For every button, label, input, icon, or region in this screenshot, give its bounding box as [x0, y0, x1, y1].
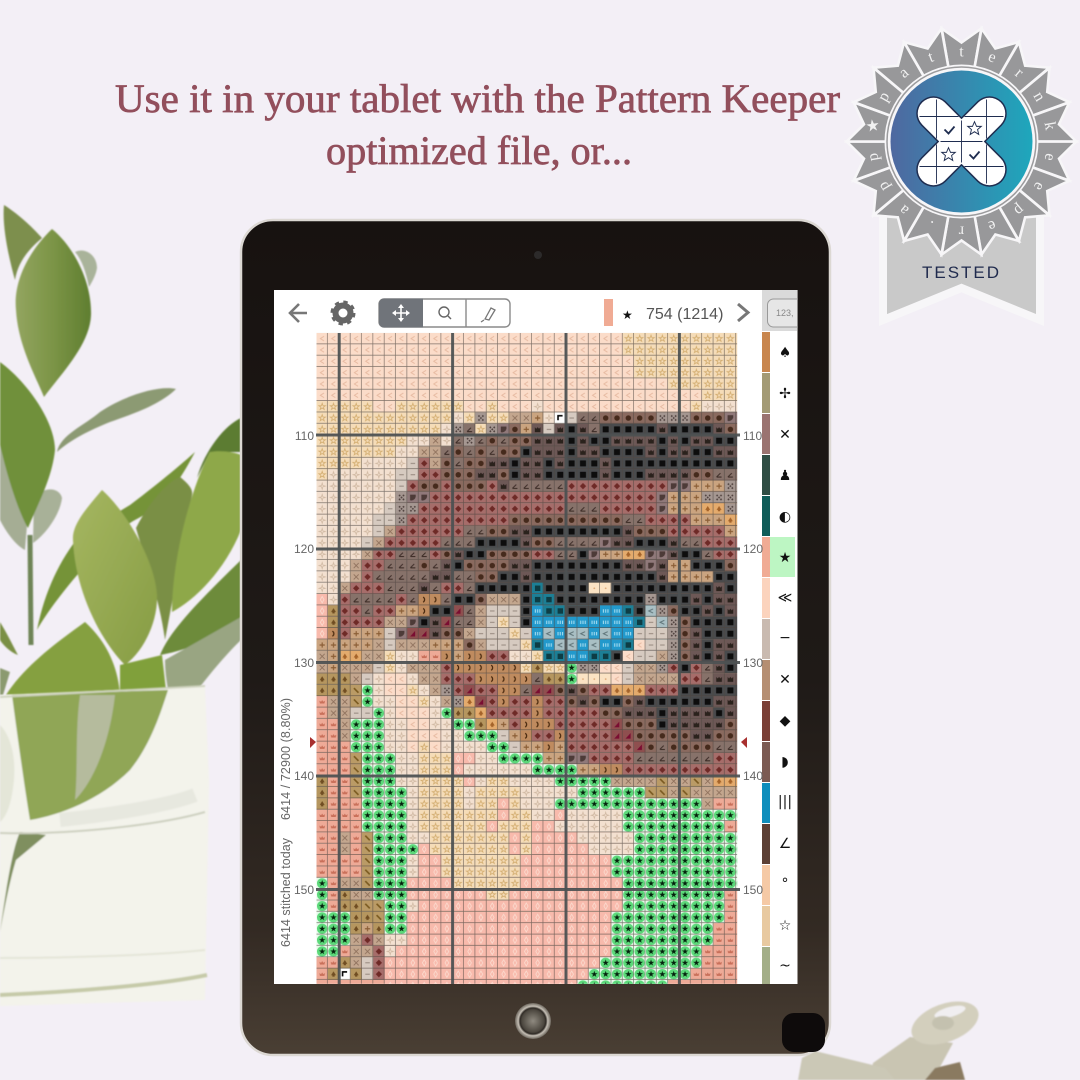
side palette: ~	[779, 958, 791, 974]
star burst with letters: e	[986, 48, 998, 67]
side palette: ≪	[778, 590, 792, 606]
star burst with letters: e	[1041, 152, 1059, 162]
row rulers: 130	[294, 656, 314, 670]
star burst with letters: r	[958, 222, 964, 240]
star burst with letters: k	[1041, 121, 1059, 131]
star burst with letters: a	[896, 64, 912, 82]
side palette: ✕	[779, 427, 791, 443]
side palette: ∠	[779, 836, 791, 852]
star burst with letters: t	[926, 48, 936, 66]
row rulers: 150	[294, 883, 314, 897]
title: optimized file, or...	[326, 128, 632, 173]
star burst with letters: p	[864, 152, 882, 162]
title	[115, 76, 840, 173]
star burst with letters: ★	[864, 117, 883, 134]
row rulers: 140	[294, 769, 314, 783]
side palette: ♠	[779, 345, 791, 361]
star burst with letters: p	[875, 179, 893, 194]
tablet body	[241, 220, 830, 1055]
row rulers: 120	[743, 542, 763, 556]
row rulers: 150	[743, 883, 763, 897]
side palette	[762, 290, 798, 984]
row rulers: 110	[295, 429, 314, 443]
side palette: ◐	[779, 509, 791, 525]
side palette: ◆	[780, 713, 791, 729]
star burst with letters	[847, 28, 1076, 254]
star burst with letters: p	[1011, 201, 1028, 219]
side palette: ♟	[779, 468, 791, 484]
row rulers: 130	[743, 656, 763, 670]
glass vase	[0, 686, 209, 1006]
star burst with letters: n	[1030, 89, 1048, 104]
side palette: °	[782, 876, 788, 892]
star burst with letters: r	[1012, 65, 1027, 82]
star burst with letters: p	[875, 89, 893, 104]
stitch cross icon	[920, 100, 1004, 184]
app toolbar: ★	[622, 308, 633, 322]
side palette: ☆	[779, 918, 791, 934]
side palette: 123,	[776, 308, 794, 318]
row rulers: 120	[294, 542, 314, 556]
chart bold grid lines	[316, 333, 740, 984]
side palette: ★	[779, 550, 791, 566]
star burst with letters: t	[959, 44, 964, 60]
badge: pattern keeper tested	[847, 28, 1076, 320]
star burst with letters: e	[1030, 179, 1048, 194]
app toolbar	[290, 298, 748, 328]
ribbon	[883, 190, 1040, 320]
side palette: |||	[778, 794, 792, 810]
star burst with letters: a	[896, 201, 912, 219]
row rulers	[294, 429, 763, 897]
side palette: ✢	[779, 386, 791, 402]
stitch progress text: 6414 / 72900 (8.80%)	[279, 698, 293, 820]
side palette: −	[779, 630, 791, 646]
row rulers: 140	[743, 769, 763, 783]
cross stitch chart	[316, 332, 738, 984]
stitch progress text: 6414 stitched today	[279, 837, 293, 947]
stitch progress text	[279, 698, 293, 947]
side palette: ✕	[779, 672, 791, 688]
star burst with letters: .	[926, 217, 936, 234]
metal clip	[798, 993, 984, 1080]
star burst with letters: e	[986, 216, 998, 235]
tested label: TESTED	[922, 263, 1001, 282]
title: Use it in your tablet with the Pattern Keeper	[115, 76, 840, 121]
app toolbar: 754 (1214)	[646, 306, 723, 323]
side palette: ◗	[781, 754, 789, 770]
inner rings and gradient disc	[884, 64, 1038, 218]
row rulers: 110	[743, 429, 762, 443]
plant leaves	[0, 205, 241, 720]
